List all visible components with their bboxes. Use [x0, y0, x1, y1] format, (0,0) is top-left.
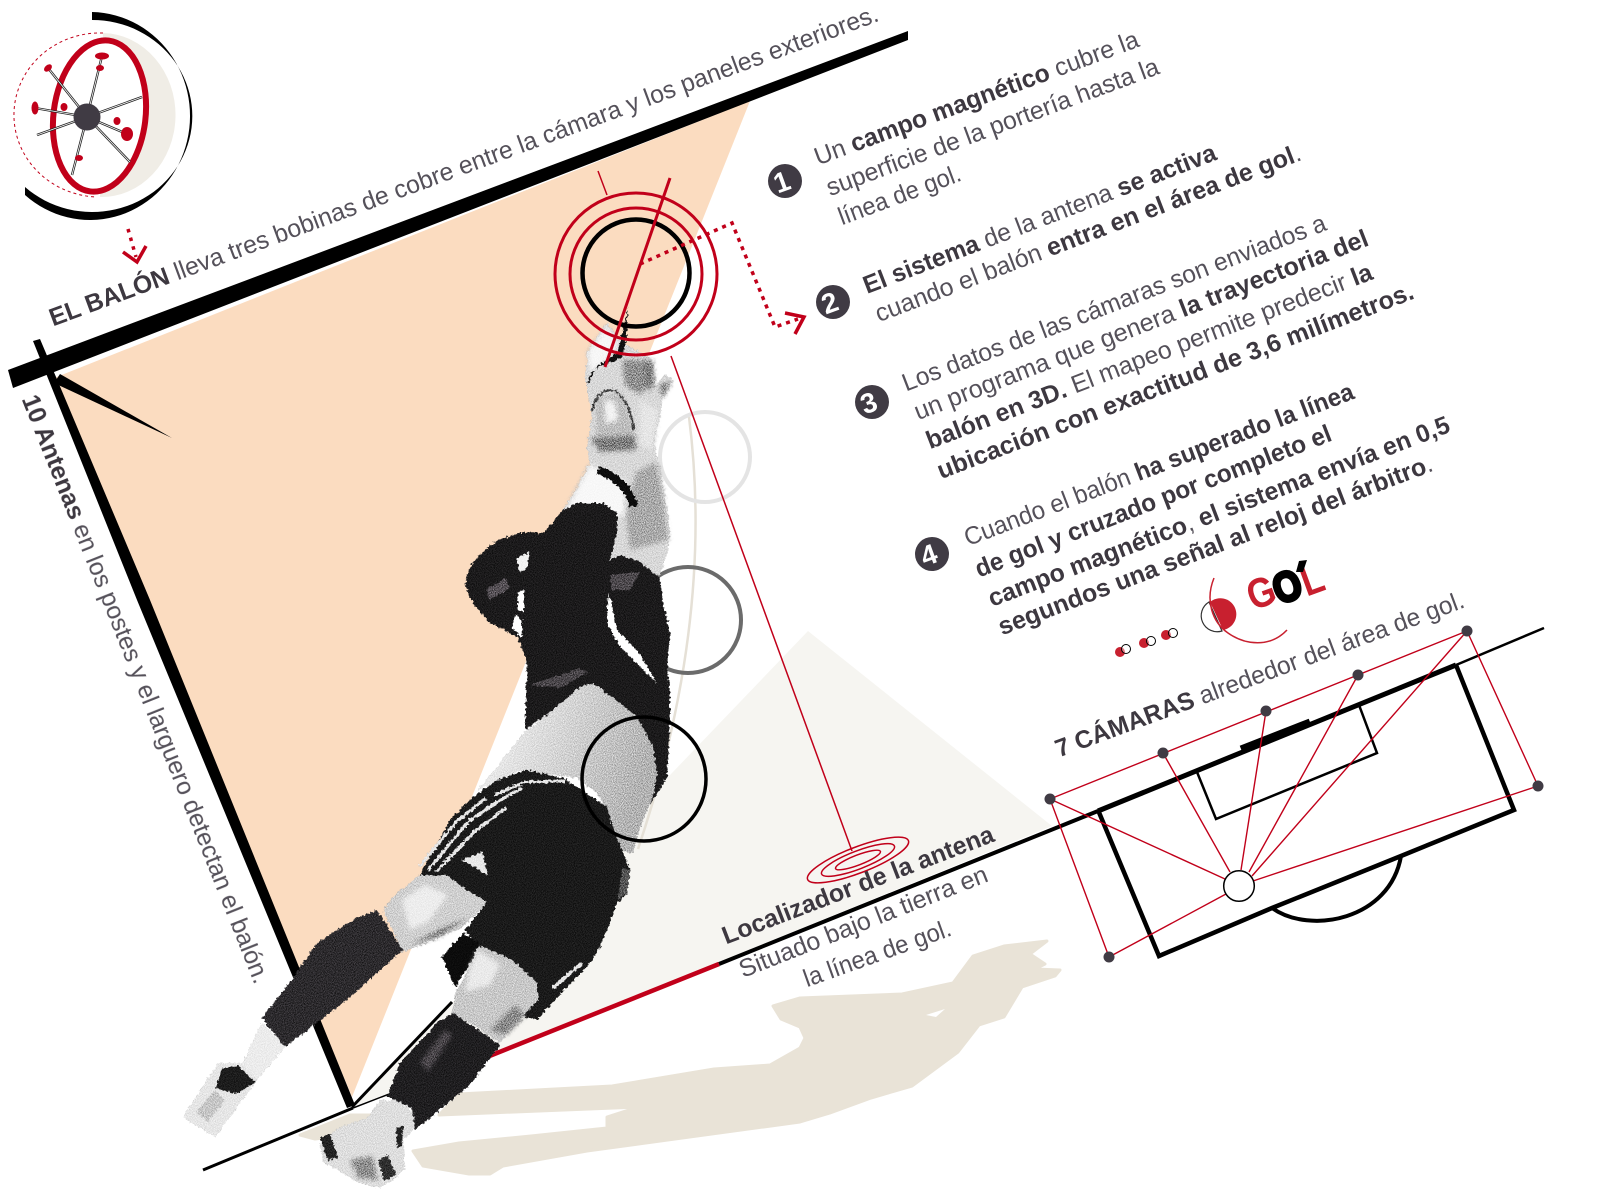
shorts [420, 770, 630, 1020]
GOL logo: L [1294, 555, 1331, 606]
front boot [320, 1100, 415, 1188]
step 3 text: ubicación con exactitud de 3,6 milímetros. [933, 278, 1418, 485]
step 3 text: un programa que genera la trayectoria del [910, 224, 1372, 426]
text: el balón: EL BALÓN lleva tres bobinas de cobre entre la cámara y los paneles exteriores. [45, 0, 882, 332]
step 3 text: balón en 3D. El mapeo permite predecir la [922, 258, 1378, 455]
dotted arrow to step 2 [640, 223, 804, 334]
hub [74, 104, 100, 130]
pale magnetic field triangle [352, 631, 1052, 1107]
small ball trail [1115, 628, 1178, 657]
step 1 text: superficie de la portería hasta la [822, 53, 1163, 202]
step 4 text: campo magnético, el sistema envía en 0,5 [984, 411, 1454, 613]
goalkeeper figure [183, 307, 673, 1188]
goal mouth [1241, 722, 1310, 749]
back shin guard [262, 910, 403, 1047]
camera dots [1044, 626, 1544, 962]
step 4 text: segundos una señal al reloj del árbitro. [994, 450, 1437, 641]
ground line with red antenna section [203, 628, 1544, 1170]
peach detection zone [54, 101, 750, 1097]
text: situado bajo la tierra: Situado bajo la tierra en [735, 860, 992, 984]
spoke highlights [35, 56, 142, 175]
ghost ball black ring [582, 717, 706, 841]
back boot [183, 1063, 257, 1137]
step 1 text: Un campo magnético cubre la [810, 25, 1143, 171]
step 1 badge: 1 [769, 165, 794, 199]
half ball and red curve [1201, 578, 1287, 643]
antenna spike [54, 374, 172, 438]
beige crescent [100, 33, 176, 197]
GOL logo: O [1266, 561, 1308, 614]
step 3 text [898, 209, 1418, 485]
red coil tips [32, 52, 133, 161]
text: 10 antenas: 10 Antenas en los postes y el larguero detectan el balón. [16, 391, 275, 988]
step 4 text: Cuando el balón ha superado la línea [960, 377, 1359, 552]
step 4 text: de gol y cruzado por completo el [971, 420, 1335, 583]
shirt lower [478, 683, 657, 853]
thin red line to antenna locator [671, 356, 852, 851]
step 3 badge: 3 [856, 386, 881, 420]
text: localizador de la antena: Localizador de la antena [718, 820, 999, 950]
front shin guard [387, 1013, 500, 1130]
small arrow under ball [123, 229, 146, 262]
camera sight lines [1050, 631, 1538, 957]
step 4 badge: 4 [916, 538, 942, 572]
GOL logo [1240, 555, 1331, 620]
spokes [35, 56, 142, 175]
goal area box [1197, 705, 1377, 819]
torso and head [465, 503, 670, 805]
step 1 text: línea de gol. [834, 160, 965, 231]
penalty box [1098, 665, 1514, 956]
goal post with antennas [33, 339, 355, 1108]
antenna locator rings [803, 829, 913, 891]
text: situado bajo la tierra: la línea de gol. [800, 914, 955, 993]
ball diagram top left [14, 12, 192, 220]
text: 7 cámaras: 7 CÁMARAS alrededor del área de gol. [1051, 585, 1468, 763]
ball with magnetic rings at top [555, 171, 717, 367]
back leg thigh [383, 875, 487, 952]
ball trajectory arc [638, 417, 696, 849]
ground shadow of goalkeeper [300, 941, 1060, 1174]
step 2 text: El sistema de la antena se activa [859, 138, 1221, 300]
plan ball [1224, 871, 1254, 901]
arms and glove [540, 307, 673, 575]
step 2 text: cuando el balón entra en el área de gol. [871, 139, 1305, 328]
step 2 badge: 2 [817, 286, 842, 320]
red coil [45, 35, 154, 197]
goal area plan [1098, 665, 1514, 956]
dotted outline [14, 33, 103, 197]
ghost ball light grey [660, 412, 750, 502]
GOL logo: G [1240, 567, 1282, 620]
black outer arc [25, 12, 192, 220]
ghost ball mid grey [635, 567, 741, 673]
front thigh [452, 945, 538, 1043]
crossbar [8, 31, 908, 388]
step 3 text: Los datos de las cámaras son enviados a [898, 209, 1330, 397]
penalty arc [1272, 856, 1401, 921]
back sock [242, 1023, 285, 1080]
